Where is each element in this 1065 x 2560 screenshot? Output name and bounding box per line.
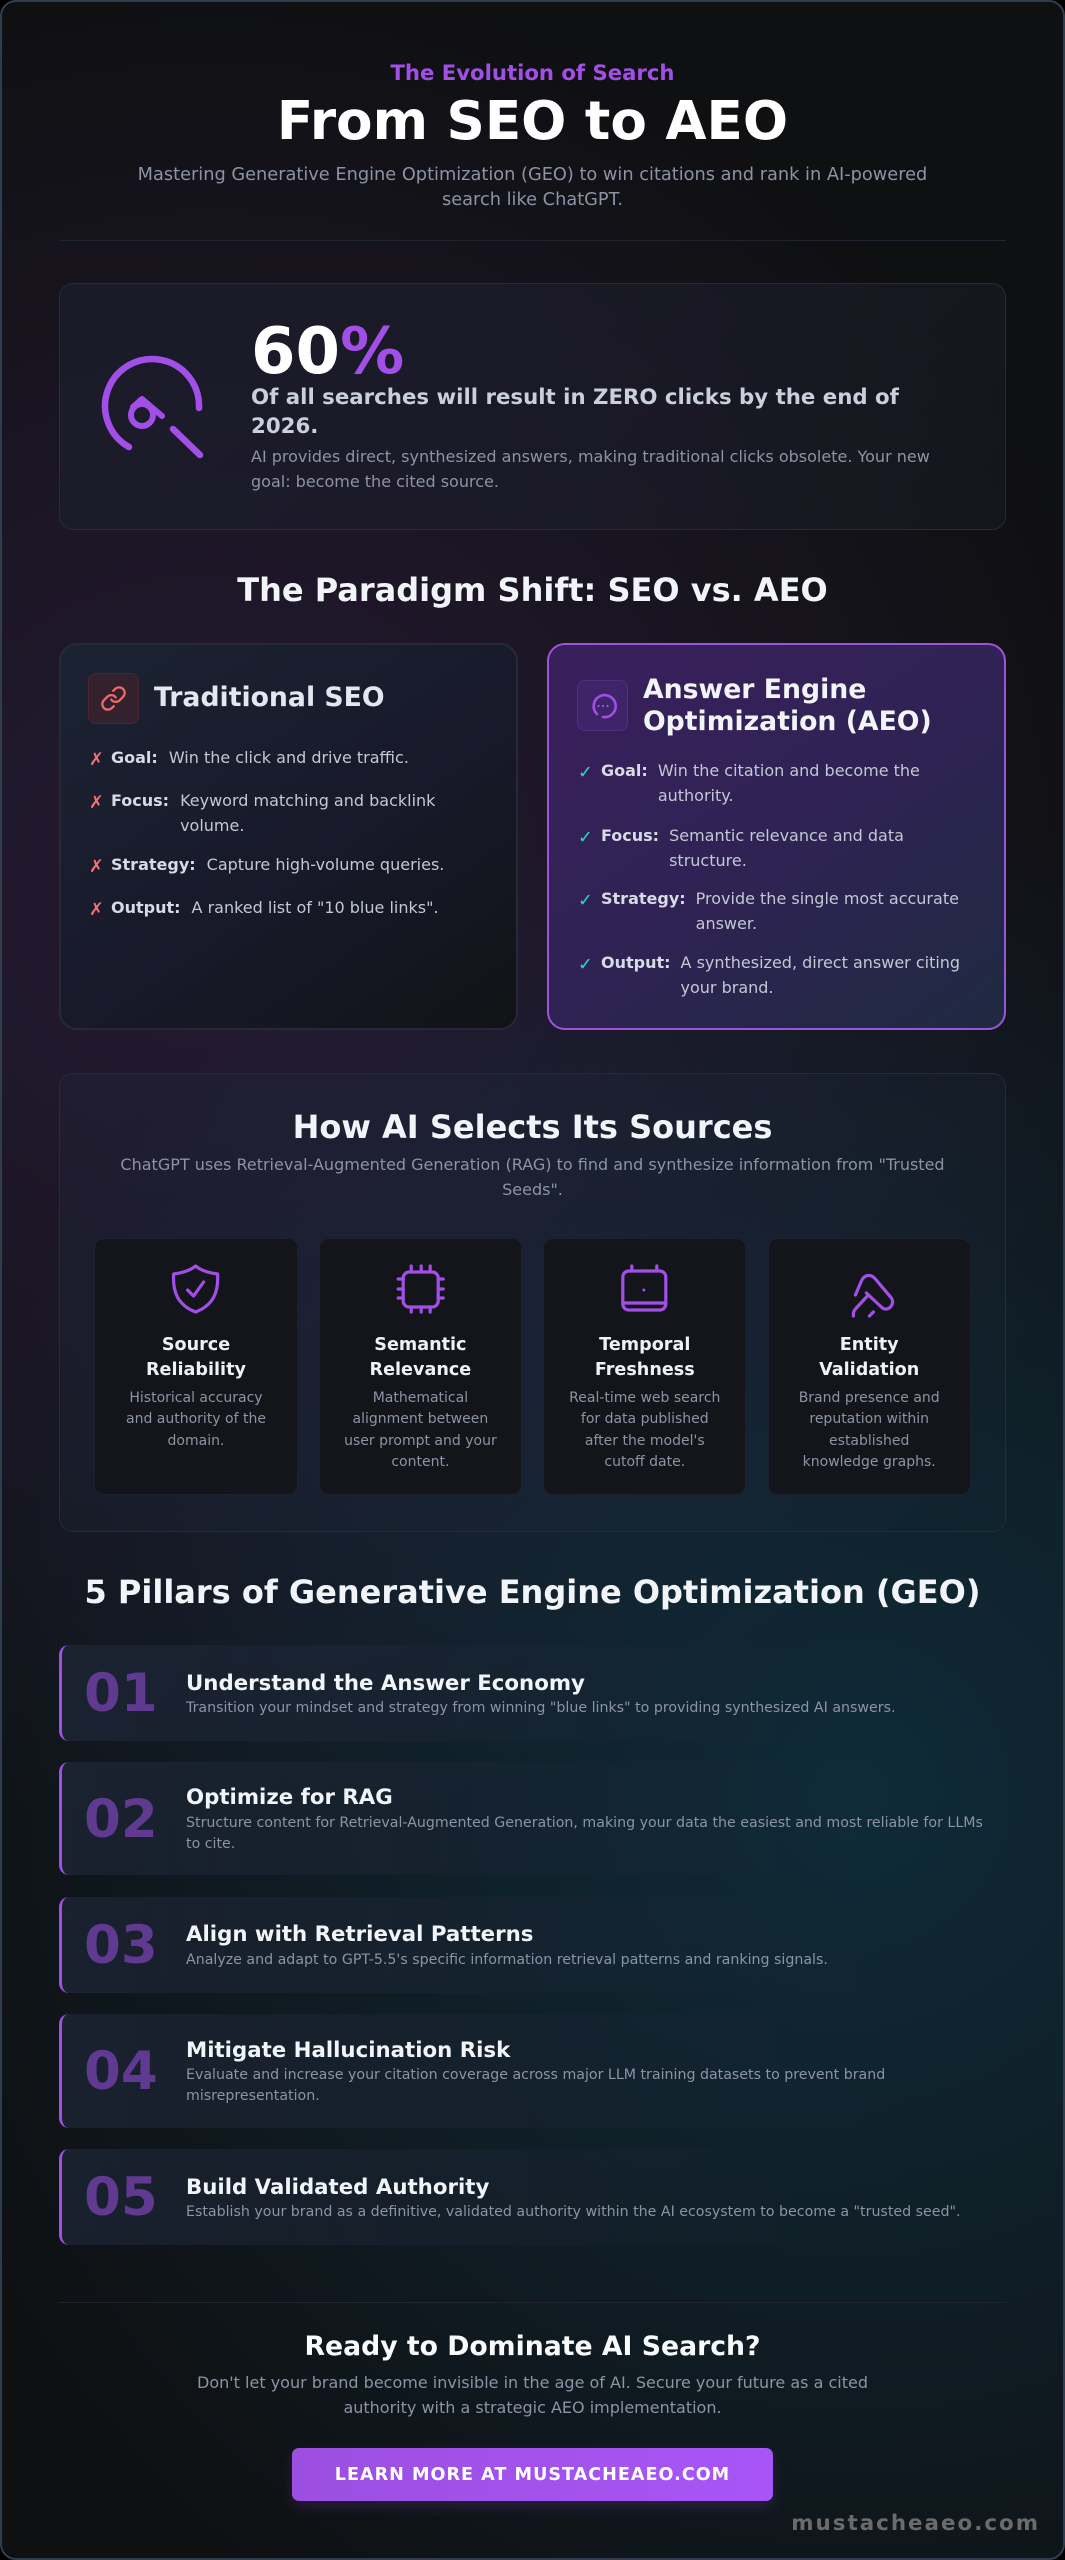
- card: entity validation: [768, 1238, 971, 1495]
- list: strategy: [578, 889, 959, 933]
- list: focus: Keyword matching and backlink: [180, 791, 435, 810]
- heading: paradigm shift: The Paradigm Shift: SEO vs. AEO: [237, 571, 828, 609]
- icon: link: [88, 673, 139, 724]
- CTA text: [197, 2373, 868, 2417]
- icon: chat: [577, 680, 628, 731]
- list: goal: authority.: [658, 786, 734, 805]
- list: output: A ranked list of "10 blue links".: [192, 898, 439, 916]
- stat headline: [251, 385, 900, 439]
- stat description: AI provides direct, synthesized answers, making traditional clicks obsolete. Your new: [251, 447, 930, 466]
- list: strategy: ✗: [89, 856, 104, 876]
- list: goal: Win the click and drive traffic.: [169, 748, 409, 767]
- heading: AEO: Answer Engine: [643, 674, 866, 705]
- section description: [120, 1155, 945, 1199]
- list: strategy: Capture high-volume queries.: [207, 854, 444, 874]
- pillar 02: Structure content for Retrieval-Augmented Generation, making your data the easiest and most reliable for LLMs: [186, 1814, 983, 1830]
- card: temporal freshness: cutoff date.: [604, 1454, 685, 1470]
- list: goal: Goal:: [111, 748, 158, 767]
- stat description: [251, 447, 930, 491]
- pillar 05: Establish your brand as a definitive, validated authority within the AI ecosystem to become a "trusted seed".: [186, 2204, 961, 2220]
- subtitle: Mastering Generative Engine Optimization (GEO) to win citations and rank in AI-powered: [138, 165, 927, 185]
- subtitle: search like ChatGPT.: [442, 190, 623, 210]
- card: temporal freshness: Freshness: [595, 1360, 695, 1380]
- list: output: Output:: [111, 898, 181, 916]
- pillar 02: Optimize for RAG: [186, 1785, 393, 1810]
- list: focus: Focus:: [601, 826, 659, 844]
- card: source reliability: Reliability: [146, 1360, 246, 1380]
- card: semantic relevance: user prompt and your: [344, 1433, 497, 1449]
- eyebrow: The Evolution of Search: [390, 60, 675, 85]
- pillar 01: [59, 1645, 1006, 1741]
- stat headline: Of all searches will result in ZERO clicks by the end of: [251, 385, 899, 410]
- stat number: 60%: [251, 315, 404, 389]
- pillar 03: Analyze and adapt to GPT-5.5's specific information retrieval patterns and ranking signals.: [186, 1952, 828, 1968]
- pillar 04: misrepresentation.: [186, 2088, 320, 2104]
- card: entity validation: established: [829, 1433, 909, 1449]
- pillar 03: Align with Retrieval Patterns: [186, 1922, 533, 1947]
- card: temporal freshness: [543, 1238, 746, 1495]
- title: From SEO to AEO: [277, 90, 788, 152]
- card: semantic relevance: alignment between: [353, 1411, 488, 1427]
- list: strategy: answer.: [696, 914, 757, 933]
- pillar 02: to cite.: [186, 1836, 235, 1852]
- CTA button: [292, 2448, 773, 2501]
- list: strategy: Strategy:: [111, 854, 196, 874]
- subtitle: [138, 165, 927, 210]
- list: goal: Goal:: [601, 761, 648, 780]
- card: temporal freshness: Real-time web search: [569, 1390, 720, 1406]
- card: source reliability: and authority of the: [126, 1411, 266, 1427]
- card: semantic relevance: Semantic: [374, 1335, 466, 1355]
- list: focus: structure.: [669, 850, 747, 870]
- pillar 01: Understand the Answer Economy: [186, 1670, 585, 1696]
- list: goal: ✗: [89, 750, 104, 770]
- pillar 01: Transition your mindset and strategy from winning "blue links" to providing synthesized AI answers.: [186, 1700, 895, 1716]
- CTA button: LEARN MORE AT MUSTACHEAEO.COM: [335, 2465, 730, 2485]
- list: output: Output:: [601, 953, 671, 972]
- pillar 04: Mitigate Hallucination Risk: [186, 2038, 510, 2062]
- icon: chip: [396, 1264, 445, 1314]
- list: output: ✗: [89, 900, 104, 920]
- list: focus: volume.: [180, 816, 244, 835]
- card: semantic relevance: [319, 1238, 522, 1495]
- list: focus: Semantic relevance and data: [669, 826, 904, 844]
- pillar 05: [59, 2149, 1006, 2245]
- pillar 02: 02: [84, 1789, 158, 1850]
- list: output: your brand.: [681, 978, 774, 997]
- pillar 05: 05: [84, 2167, 158, 2228]
- card: semantic relevance: Mathematical: [373, 1390, 468, 1406]
- card: source reliability: Source: [162, 1335, 230, 1355]
- list: output: [89, 898, 439, 920]
- CTA text: Don't let your brand become invisible in the age of AI. Secure your future as a cited: [197, 2373, 868, 2392]
- card: temporal freshness: for data published: [581, 1411, 709, 1427]
- list: focus: [578, 826, 904, 870]
- panel: zero click stat: [59, 283, 1006, 530]
- list: output: ✓: [578, 955, 593, 975]
- card: entity validation: Entity: [840, 1335, 899, 1355]
- pillar 04: [59, 2014, 1006, 2128]
- icon: entity: [852, 1274, 894, 1318]
- card: source reliability: [94, 1238, 298, 1495]
- watermark: mustacheaeo.com: [791, 2511, 1040, 2536]
- icon: calendar: [621, 1264, 668, 1312]
- pillar 05: Build Validated Authority: [186, 2174, 489, 2200]
- heading: 5 pillars: 5 Pillars of Generative Engine Optimization (GEO): [85, 1573, 980, 1611]
- card: semantic relevance: Relevance: [370, 1360, 471, 1380]
- pillar 04: 04: [84, 2041, 158, 2102]
- heading: how AI selects: How AI Selects Its Sources: [293, 1108, 772, 1146]
- heading: AEO: Optimization (AEO): [643, 706, 932, 737]
- panel: AEO: [547, 643, 1006, 1030]
- card: semantic relevance: content.: [391, 1454, 449, 1470]
- card: source reliability: domain.: [168, 1433, 224, 1449]
- list: output: A synthesized, direct answer citing: [681, 953, 960, 972]
- list: focus: ✓: [578, 828, 593, 848]
- pillar 03: [59, 1897, 1006, 1993]
- heading: AEO: [643, 674, 932, 737]
- card: temporal freshness: Temporal: [599, 1335, 690, 1355]
- list: goal: ✓: [578, 763, 593, 783]
- icon: shield: [172, 1264, 220, 1314]
- list: strategy: ✓: [578, 891, 593, 911]
- card: temporal freshness: after the model's: [585, 1433, 705, 1449]
- section description: ChatGPT uses Retrieval-Augmented Generation (RAG) to find and synthesize information from "Trusted: [120, 1155, 945, 1174]
- CTA heading: Ready to Dominate AI Search?: [304, 2331, 761, 2362]
- list: focus: Focus:: [111, 791, 169, 810]
- card: entity validation: Brand presence and: [799, 1390, 940, 1406]
- card: entity validation: reputation within: [809, 1411, 929, 1427]
- stat description: goal: become the cited source.: [251, 472, 499, 491]
- list: focus: ✗: [89, 793, 104, 813]
- pillar 02: [59, 1762, 1006, 1875]
- list: goal: [89, 748, 409, 770]
- list: strategy: Provide the single most accurate: [696, 889, 959, 908]
- CTA text: authority with a strategic AEO implementation.: [343, 2398, 722, 2417]
- list: focus: [89, 791, 436, 835]
- list: goal: Win the citation and become the: [658, 761, 920, 780]
- stat headline: 2026.: [251, 414, 318, 439]
- panel: how AI selects sources: [59, 1073, 1006, 1532]
- pillar 03: 03: [84, 1915, 158, 1976]
- card: source reliability: Historical accuracy: [129, 1390, 263, 1406]
- heading: traditional SEO: Traditional SEO: [154, 682, 385, 713]
- list: strategy: Strategy:: [601, 889, 686, 908]
- card: entity validation: knowledge graphs.: [803, 1454, 936, 1470]
- pillar 01: 01: [84, 1663, 158, 1724]
- list: goal: [578, 761, 920, 805]
- card: entity validation: Validation: [819, 1360, 919, 1380]
- list: strategy: [89, 854, 444, 876]
- icon: target search: [102, 356, 204, 458]
- panel: traditional SEO: [59, 643, 518, 1030]
- section description: Seeds".: [502, 1180, 563, 1199]
- list: output: [578, 953, 960, 997]
- pillar 04: Evaluate and increase your citation coverage across major LLM training datasets to prevent brand: [186, 2066, 885, 2082]
